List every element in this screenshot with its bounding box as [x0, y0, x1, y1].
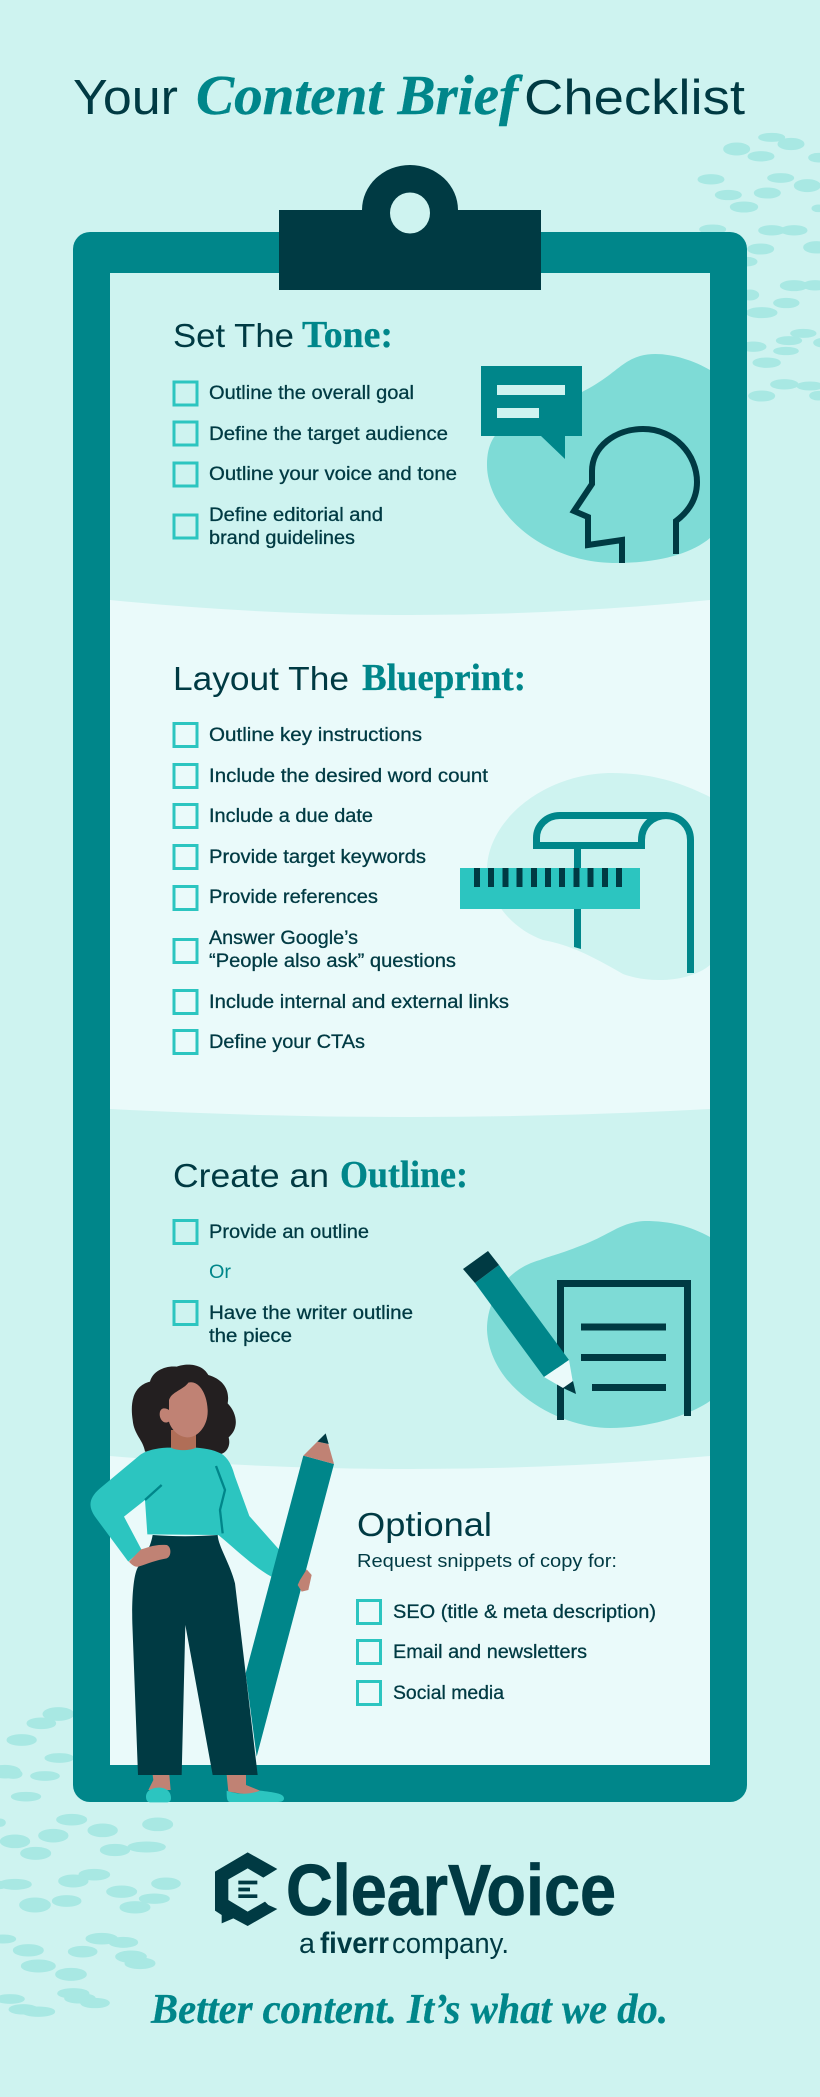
- background speckles: top right: [698, 134, 820, 401]
- slogan: Better content. It’s what we do.: [150, 1987, 668, 2033]
- icon: speaking head: [481, 354, 710, 563]
- checklist: layout the blueprint: Include a due date: [209, 806, 373, 827]
- title: [73, 65, 745, 127]
- checklist: layout the blueprint: Outline key instructions: [209, 725, 422, 746]
- icon: pencil and document: [463, 1221, 710, 1428]
- heading: optional: Optional: [357, 1506, 492, 1543]
- tagline: a fiverr company: fiverr: [320, 1927, 389, 1960]
- checklist: layout the blueprint: Answer Google’s: [209, 928, 358, 949]
- checklist: create an outline: Or: [209, 1262, 232, 1283]
- title: Checklist: [524, 71, 745, 125]
- heading: layout the blueprint: Blueprint:: [362, 657, 526, 699]
- checklist: layout the blueprint: Include internal and external links: [209, 992, 509, 1013]
- checklist: layout the blueprint: Include the desired word count: [209, 766, 489, 787]
- tagline: a fiverr company: a: [299, 1928, 316, 1960]
- checklist: create an outline: Provide an outline: [209, 1222, 369, 1243]
- checklist: set the tone: Define editorial and: [209, 505, 383, 526]
- checklist: set the tone: Outline your voice and tone: [209, 464, 457, 485]
- checklist: optional: Social media: [393, 1683, 504, 1704]
- heading: set the tone: [173, 314, 393, 356]
- checklist: set the tone: [174, 382, 457, 549]
- heading: create an outline: Create an: [173, 1157, 329, 1194]
- tagline: a fiverr company: [299, 1927, 509, 1960]
- panel: optional: [357, 1506, 656, 1704]
- clipboard clip: [279, 165, 541, 290]
- panel: create an outline: [173, 1154, 710, 1428]
- checklist: create an outline: Have the writer outline: [209, 1303, 413, 1324]
- checklist: layout the blueprint: [174, 724, 509, 1054]
- section background: create an outline: [110, 1109, 710, 1469]
- checklist: set the tone: Define the target audience: [209, 424, 448, 445]
- wordmark: ClearVoice: [286, 1851, 616, 1931]
- heading: set the tone: Set The: [173, 317, 294, 354]
- title: Your: [73, 71, 178, 125]
- panel: layout the blueprint: [173, 657, 710, 1054]
- icon: clearvoice mark: [215, 1852, 277, 1926]
- icon: blueprint and ruler: [460, 773, 710, 980]
- heading: layout the blueprint: [173, 657, 526, 699]
- subheading: request snippets: Request snippets of copy for:: [357, 1551, 617, 1571]
- paper sheet: [110, 273, 710, 1765]
- background speckles: bottom left: [0, 1708, 180, 2016]
- title: Content Brief: [196, 65, 523, 127]
- panel: set the tone: [173, 314, 710, 563]
- clipboard frame lower part: [73, 700, 747, 1802]
- checklist: layout the blueprint: Provide references: [209, 887, 378, 908]
- checklist: set the tone: Outline the overall goal: [209, 383, 414, 404]
- clipboard board: [73, 232, 747, 802]
- logo: clearvoice: [215, 1851, 616, 1960]
- checklist: optional: Email and newsletters: [393, 1642, 587, 1663]
- tagline: a fiverr company: company.: [392, 1928, 509, 1960]
- section background: set the tone: [110, 273, 710, 615]
- checklist: set the tone: brand guidelines: [209, 528, 355, 549]
- heading: layout the blueprint: Layout The: [173, 660, 349, 697]
- checklist: create an outline: [174, 1220, 413, 1347]
- checklist: optional: SEO (title & meta description): [393, 1602, 656, 1623]
- heading: create an outline: [173, 1154, 468, 1196]
- checklist: create an outline: the piece: [209, 1326, 292, 1347]
- heading: create an outline: Outline:: [340, 1154, 468, 1196]
- checklist: layout the blueprint: Provide target keywords: [209, 847, 426, 868]
- heading: set the tone: Tone:: [302, 314, 393, 356]
- checklist: layout the blueprint: “People also ask” questions: [209, 951, 456, 972]
- checklist: optional: [358, 1600, 656, 1704]
- checklist: layout the blueprint: Define your CTAs: [209, 1032, 365, 1053]
- illustration: woman holding a giant pencil: [90, 1365, 334, 1802]
